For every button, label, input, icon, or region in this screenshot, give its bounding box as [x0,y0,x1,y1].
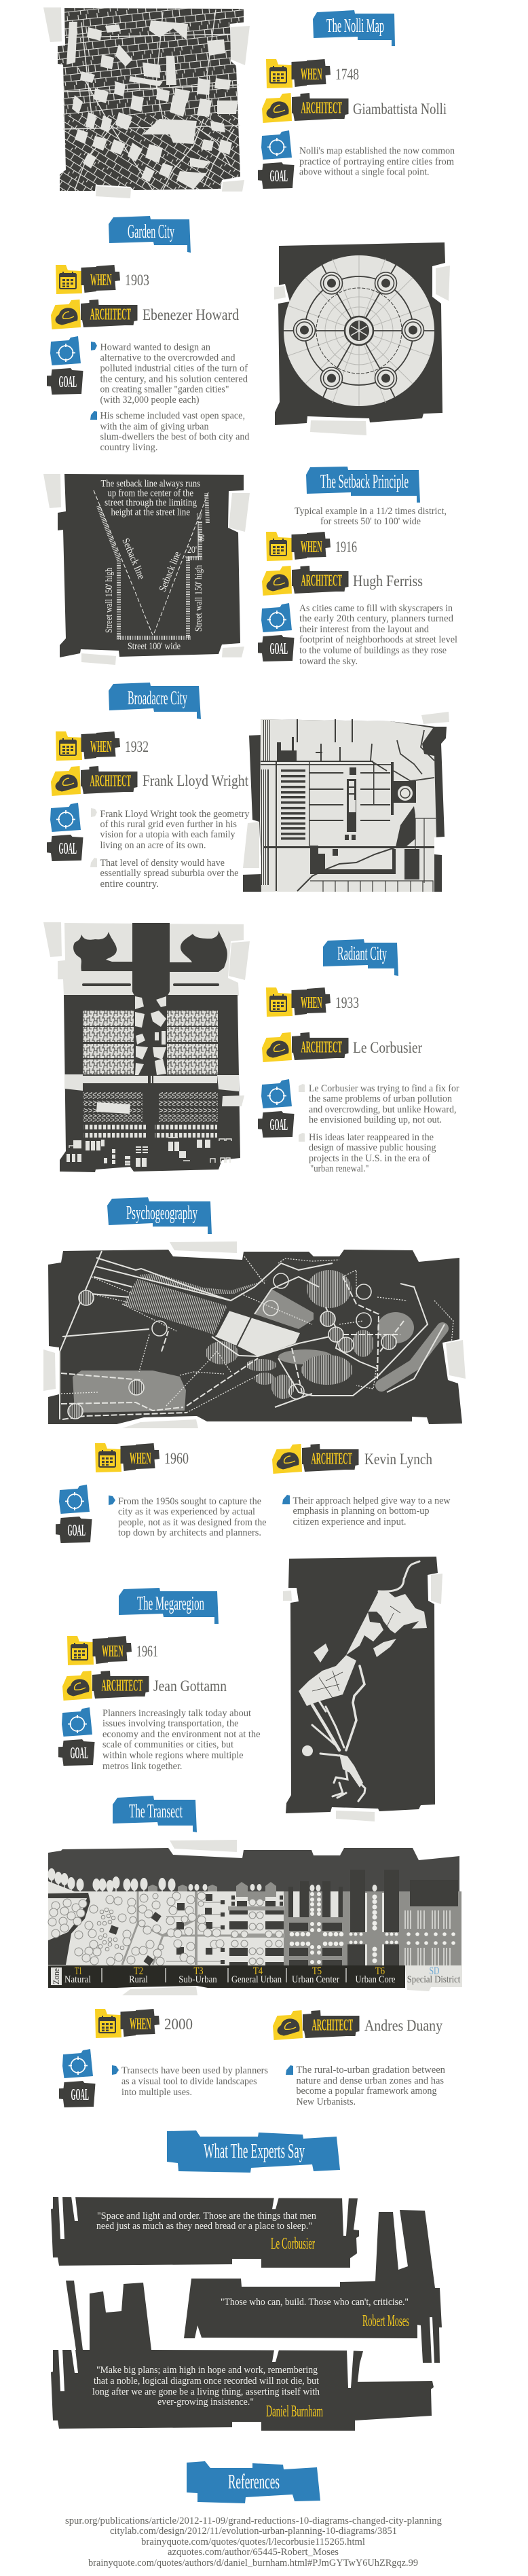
heading: References [187,2461,320,2503]
ground zones [48,1891,231,1965]
diagram: setback section: The setback line always runs [100,479,200,490]
goal text 1: Transects have been used by planners [121,2065,268,2076]
quote: Daniel Burnham: ever-growing insistence." [157,2397,254,2408]
hatched districts [123,1273,268,1335]
heading: Radiant City [323,939,398,976]
when badge: 2000 [164,2016,193,2033]
diagram: setback section: Setback line [119,537,147,581]
architect badge [262,93,447,123]
goal badge: GOAL [58,374,77,391]
when badge [56,265,149,294]
diagram: setback section: up from the center of the [107,488,193,499]
goal text 1: of this rural grid even further in his [100,819,237,830]
architect badge: ARCHITECT [312,2017,353,2035]
goal text 1: Le Corbusier was trying to find a fix for [309,1083,459,1094]
hatched street walls [98,492,208,640]
goal text 2: That level of density would have [100,858,225,869]
tree canopies on plan [48,1892,282,1965]
section: Broadacre City [47,683,449,892]
when badge: WHEN [90,738,112,756]
architect badge: Andres Duany [364,2017,442,2034]
goal text 2: essentially spread suburbia over the [100,868,239,879]
architect badge: Frank Lloyd Wright [143,772,249,789]
heading: References: References [228,2469,280,2493]
goal text 1 [91,342,248,405]
quote: Robert Moses: "Those who can, build. Those who can't, criticise." [221,2297,409,2308]
node circles [152,1273,371,1399]
when badge: WHEN [301,66,322,84]
heading: Garden City [109,216,191,253]
architect badge: ARCHITECT [311,1451,352,1468]
goal text 2 [90,411,250,453]
when badge: 1960 [164,1450,189,1467]
tree row [48,1868,377,1892]
architect badge: ARCHITECT [90,306,131,323]
goal text 2: New Urbanists. [296,2097,356,2107]
roads [122,1891,285,1965]
section: The Transect [48,1796,462,2107]
zone legend: T2 [134,1965,143,1977]
goal text 2 [282,1495,451,1527]
goal text 2: His ideas later reappeared in the [309,1132,434,1143]
when badge: 1932 [125,738,149,755]
goal badge [258,1079,295,1138]
quote: Robert Moses: Robert Moses [362,2312,409,2330]
quote: Daniel Burnham: Daniel Burnham [266,2403,323,2420]
goal text 1 [112,2065,268,2098]
goal text 1: (with 32,000 people each) [100,395,200,405]
zone legend: T6 [375,1965,385,1977]
when badge: WHEN [301,539,322,556]
heading: The Megaregion [119,1588,219,1624]
when badge: WHEN [130,2016,151,2033]
when badge [56,731,149,761]
diagram: setback section: height at the street line [111,507,190,518]
goal badge: GOAL [68,1522,86,1540]
goal text 2: country living. [100,442,157,453]
heading: Psychogeography: Psychogeography [126,1203,197,1224]
subheading [295,506,447,527]
goal text 2: "urban renewal." [310,1163,369,1174]
heading: The Nolli Map: The Nolli Map [326,16,384,37]
heading: The Transect [113,1796,197,1832]
goal text 2: entire country. [100,879,159,890]
goal text 2 [299,1132,436,1174]
goal badge [56,1485,92,1543]
architect badge [262,566,423,596]
goal text 1 [109,1495,267,1538]
heading: Garden City: Garden City [128,221,174,242]
goal text 2: projects in the U.S. in the era of [309,1153,430,1164]
architect badge: Hugh Ferriss [353,573,423,589]
zone legend: T5 [312,1965,322,1977]
subheading: for streets 50' to 100' wide [320,516,421,527]
goal text 1: the same problems of urban pollution [309,1093,452,1104]
section: The Megaregion [58,1557,442,1821]
architect badge [272,1444,432,1474]
goal text: within whole regions where multiple [102,1750,244,1761]
diagram: setback section: Street wall 150' high [104,568,115,633]
goal text 1: Frank Lloyd Wright took the geometry [100,809,250,820]
diagram: setback section: Street 100' wide [128,641,181,652]
zone legend [48,1965,462,1995]
goal badge: GOAL [71,2086,89,2104]
goal text 1: people, not as it was designed from the [118,1517,267,1528]
quote: Daniel Burnham: that a noble, logical diagram once recorded will not die, but [94,2376,320,2387]
goal text 2: nature and dense urban zones and has [296,2075,444,2086]
paths [60,1251,445,1419]
goal text: toward the sky. [299,656,358,667]
quote: Le Corbusier: "Space and light and order. Those are the things that men [97,2211,316,2221]
when badge [67,1636,158,1665]
zone legend: Urban Core [356,1974,396,1985]
zone legend: Urban Center [292,1974,339,1985]
architect badge: Jean Gottamn [153,1677,227,1694]
goal text 1: top down by architects and planners. [118,1527,261,1538]
when badge [266,532,357,561]
diagram: Garden City plan [274,242,450,435]
diagram: setback section: 20' [187,545,197,556]
heading: The Transect: The Transect [129,1801,183,1822]
goal text 2: The rural-to-urban gradation between [296,2065,445,2075]
when badge: WHEN [301,994,322,1012]
goal text 1: the century, and his solution centered [100,374,248,384]
goal text [102,1708,261,1772]
when badge: WHEN [90,272,112,289]
goal text: issues involving transportation, the [102,1718,239,1729]
zone legend: SD [429,1965,440,1977]
when badge: WHEN [102,1643,124,1661]
diagram: setback section [43,474,250,665]
architect badge: Ebenezer Howard [143,306,239,323]
architect badge: ARCHITECT [90,773,131,791]
dark buildings [109,1870,458,1965]
goal text 1: and overcrowding, but unlike Howard, [309,1104,456,1115]
zone legend: Rural [129,1974,148,1985]
map: Broadacre City plan [243,712,449,892]
architect badge: ARCHITECT [301,572,342,589]
heading: Broadacre City [109,683,201,719]
when badge: WHEN [130,1450,151,1468]
subheading: Typical example in a 11/2 times district, [295,506,447,517]
top dark blobs [73,923,227,998]
architect badge: Giambattista Nolli [353,101,447,117]
goal text 1: alternative to the overcrowded and [100,352,235,363]
goal text: above without a single focal point. [299,167,429,178]
reference list: citylab.com/design/2012/11/evolution-urban-planning-10-diagrams/3851 [110,2526,397,2537]
infographic canvas [43,7,466,2568]
diagram: rural to urban transect [48,1840,462,1995]
zone legend: T3 [194,1965,204,1977]
goal text: footprint of neighborhoods at street level [299,634,457,645]
map: Radiant City plan [43,922,250,1172]
map: northeast megaregion [283,1557,442,1821]
quote: Daniel Burnham: long after we are gone be a living thing, asserting itself with [92,2387,320,2397]
block grid [83,1011,218,1074]
reference list [65,2516,442,2569]
goal badge: GOAL [71,1745,88,1762]
goal text 1: vision for a utopia with each family [100,829,235,840]
goal badge [258,130,295,189]
goal text 1: into multiple uses. [121,2087,192,2098]
goal text 2 [90,858,239,890]
quote: Robert Moses [184,2210,442,2363]
section: What The Experts Say [51,2130,442,2431]
map: Nolli figure-ground plan [43,7,250,198]
architect badge [273,2010,442,2040]
architect badge: ARCHITECT [102,1677,143,1695]
diagram: setback section: 60' [196,533,207,541]
goal text 2: become a popular framework among [296,2086,437,2097]
when badge: 1916 [335,539,357,556]
goal text 2: slum-dwellers the best of both city and [100,432,250,443]
diagram: setback section: 10' [196,511,202,522]
section: The Nolli Map [43,7,455,198]
goal text 2: citizen experience and input. [293,1517,406,1527]
zone legend: T4 [253,1965,263,1977]
goal text 1 [91,808,250,851]
goal badge [58,1707,95,1766]
goal text 1: he envisioned building up, not out. [309,1114,442,1125]
goal text 1: Howard wanted to design an [100,342,210,353]
zone legend: Sub-Urban [178,1974,217,1985]
goal text: practice of portraying entire cities from [299,156,454,167]
goal text 1: on creating smaller "garden cities" [100,384,229,395]
architect badge [262,1032,422,1062]
architect badge [51,766,249,796]
urban dots [290,1892,455,1964]
reference list: brainyquote.com/quotes/quotes/l/lecorbusie115265.html [141,2537,365,2547]
goal text: As cities came to fill with skyscrapers in [299,603,453,614]
goal badge: GOAL [270,1117,288,1134]
goal text: the early 20th century, planners turned [299,613,453,624]
goal text 2: emphasis in planning on bottom-up [293,1506,429,1517]
diagram: setback section: Setback line [157,550,183,593]
goal text 1: From the 1950s sought to capture the [118,1496,261,1507]
zone legend: General Urban [231,1974,282,1985]
zone legend: Natural [64,1974,91,1985]
goal text [299,603,457,667]
zone legend: Zone [51,1968,61,1984]
architect badge [62,1671,227,1701]
goal text: scale of communities or cities, but [102,1739,234,1750]
goal text: their interest from the layout and [299,624,429,635]
heading: The Setback Principle: The Setback Principle [320,471,409,492]
heading: Radiant City: Radiant City [337,943,387,964]
when badge [95,1443,189,1472]
diagram: setback section: street through the limiting [105,498,197,509]
quote: Daniel Burnham: "Make big plans; aim high in hope and work, remembering [96,2365,318,2376]
section: Radiant City [43,922,459,1174]
diagram: setback section: Street wall 150' high [193,565,204,632]
goal text [299,146,455,178]
goal text: to the volume of buildings as they rose [299,645,447,656]
goal text: Planners increasingly talk today about [102,1708,252,1719]
goal text 1 [299,1083,459,1125]
architect badge: Le Corbusier [353,1039,422,1056]
when badge [266,987,359,1017]
section: References [65,2461,442,2569]
section: Garden City [47,216,450,453]
quote: Le Corbusier: need just as much as they need bread or a place to sleep." [96,2221,312,2232]
architect badge: Kevin Lynch [364,1451,432,1468]
goal text 1: as a visual tool to divide landscapes [121,2076,257,2087]
heading: What The Experts Say: What The Experts Say [204,2139,305,2162]
heading: The Nolli Map [313,10,395,46]
goal badge [47,336,83,395]
when badge: 1933 [335,994,359,1011]
map: Lynch image of the city [43,1241,466,1428]
heading: The Megaregion: The Megaregion [137,1593,204,1614]
reference list: brainyquote.com/quotes/authors/d/daniel_burnham.html#PJmGYTwY6UhZRgqz.99 [88,2558,418,2569]
when badge: 1961 [136,1643,158,1660]
goal text 1: polluted industrial cities of the turn of [100,363,248,374]
architect badge: ARCHITECT [301,1039,342,1057]
heading: Psychogeography [107,1197,212,1234]
when badge: 1748 [335,66,359,83]
architect badge [51,300,239,329]
goal text: Nolli's map established the now common [299,146,455,157]
architect badge: ARCHITECT [301,99,342,117]
goal text 1: city as it was experienced by actual [118,1506,255,1517]
goal text: economy and the environment not at the [102,1729,261,1740]
goal badge: GOAL [270,168,288,185]
heading: What The Experts Say [167,2130,340,2173]
reference list: spur.org/publications/article/2012-11-09/grand-reductions-10-diagrams-changed-city-planning [65,2516,442,2526]
zone legend: T1 [75,1965,82,1977]
quote: Le Corbusier [51,2196,359,2268]
heading: The Setback Principle [306,467,420,503]
section: The Setback Principle [43,467,457,667]
when badge [266,59,359,88]
goal text 2 [286,2065,445,2107]
quote: Daniel Burnham [51,2281,434,2431]
section: Psychogeography [43,1197,466,1543]
goal text 1: living on an acre of its own. [100,840,206,851]
goal text 2: His scheme included vast open space, [100,411,245,422]
gray districts [73,1289,414,1413]
goal badge: GOAL [270,640,288,658]
quote: Le Corbusier: Le Corbusier [271,2235,315,2253]
goal badge [47,803,83,861]
goal text 2: Their approach helped give way to a new [293,1495,451,1506]
reference list: azquotes.com/author/65445-Robert_Moses [168,2547,339,2558]
goal text 2: design of massive public housing [309,1142,436,1153]
when badge: 1903 [125,272,149,289]
when badge [95,2009,193,2038]
heading: Broadacre City: Broadacre City [128,688,187,709]
goal badge [258,603,295,661]
land mass [299,1591,427,1788]
goal badge [59,2049,95,2107]
goal text: metros link together. [102,1761,182,1772]
zone legend: Special District [407,1974,461,1985]
goal badge: GOAL [58,840,77,858]
goal text 2: with the aim of giving urban [100,421,209,432]
